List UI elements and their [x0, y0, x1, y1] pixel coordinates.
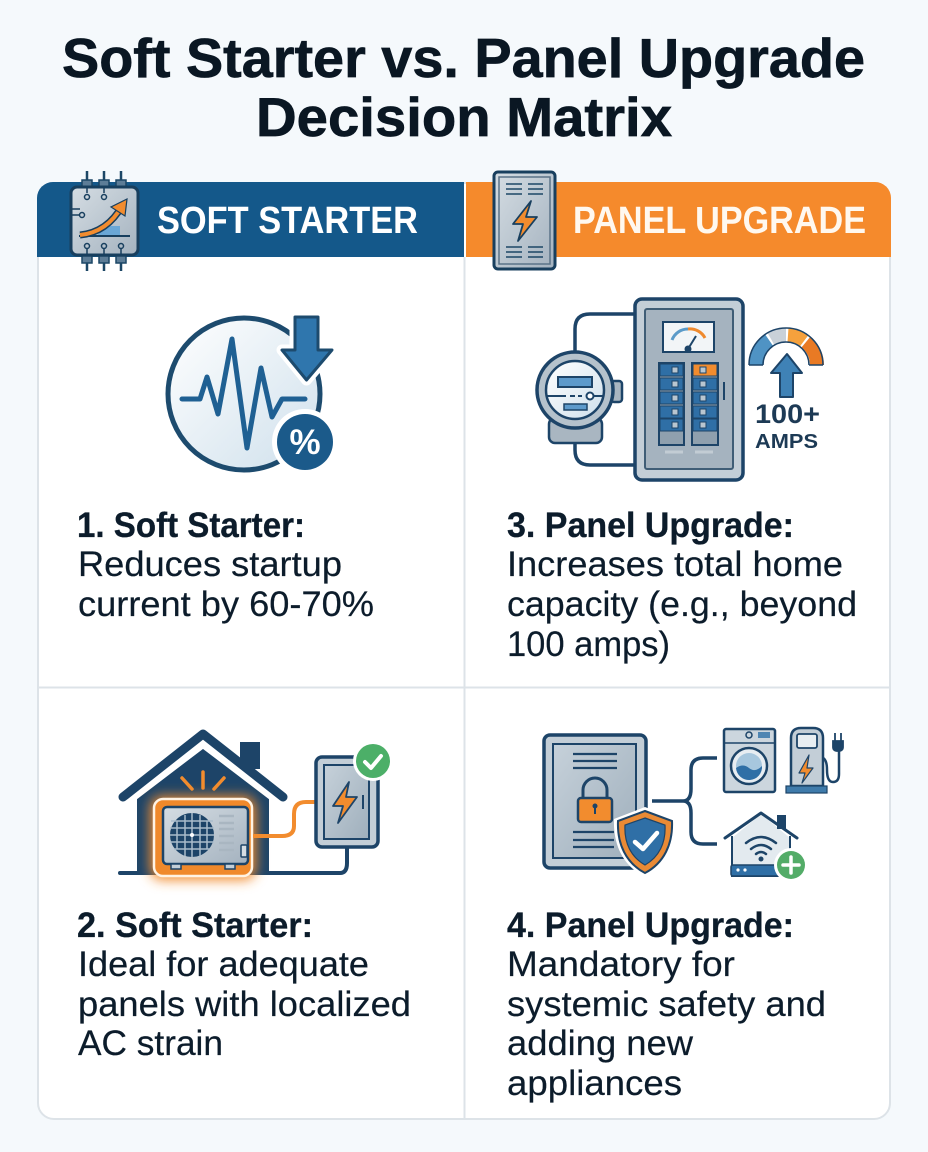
header: panel upgrade — [466, 172, 891, 269]
text block: item 2: 2. Soft Starter: — [77, 906, 313, 945]
title: Soft Starter vs. Panel Upgrade — [62, 27, 865, 89]
icon: chip with rising arrow — [71, 171, 138, 271]
header label: panel upgrade: PANEL UPGRADE — [573, 200, 866, 242]
AC unit glowing — [150, 796, 256, 880]
text block: item 2: Ideal for adequate — [78, 945, 369, 984]
title: Decision Matrix — [256, 86, 672, 148]
capacity gauge: AMPS — [755, 431, 818, 453]
text block: item 4: systemic safety and — [507, 985, 826, 1024]
EV charger — [786, 728, 843, 793]
icon: locked panel, shield and new appliances — [544, 728, 843, 882]
header: soft starter — [37, 171, 464, 271]
text block: item 1: current by 60-70% — [78, 585, 374, 624]
text block: item 3: Increases total home — [507, 545, 843, 584]
electric meter — [537, 352, 622, 443]
header label: soft starter: SOFT STARTER — [157, 200, 418, 242]
text block: item 4: appliances — [507, 1064, 682, 1103]
smart home with plus — [725, 813, 808, 882]
text block: item 2: panels with localized — [78, 985, 411, 1024]
icon: meter, breaker panel and 100+ amps gauge — [537, 299, 823, 480]
text block: item 1 — [77, 506, 374, 624]
text block: item 1: 1. Soft Starter: — [77, 506, 305, 545]
text block: item 3: 3. Panel Upgrade: — [507, 506, 794, 545]
text block: item 3: 100 amps) — [507, 625, 670, 664]
orange connection wire — [253, 802, 316, 836]
text block: item 4: Mandatory for — [507, 945, 735, 984]
icon: house with AC unit and panel — [120, 734, 393, 880]
washing machine — [724, 729, 775, 792]
sound rays — [182, 772, 224, 789]
text block: item 2: AC strain — [78, 1024, 223, 1063]
shield with check — [614, 807, 676, 877]
text block: item 2 — [77, 906, 411, 1063]
text block: item 4 — [507, 906, 826, 1103]
text block: item 4: adding new — [507, 1024, 694, 1063]
text block: item 3 — [507, 506, 857, 664]
panel: matrix card — [38, 183, 890, 1119]
locked panel — [544, 735, 646, 868]
capacity gauge: 100+ — [755, 399, 820, 429]
text block: item 3: capacity (e.g., beyond — [507, 585, 857, 624]
breaker panel — [635, 299, 743, 480]
icon: electrical panel with bolt — [494, 172, 555, 269]
capacity gauge — [749, 328, 823, 453]
text block: item 1: Reduces startup — [78, 545, 342, 584]
title — [62, 27, 865, 148]
icon: current waveform with down arrow and percent: % — [289, 423, 321, 462]
icon: current waveform with down arrow and percent — [168, 317, 338, 475]
text block: item 4: 4. Panel Upgrade: — [507, 906, 794, 945]
adequate panel with check — [316, 741, 393, 847]
